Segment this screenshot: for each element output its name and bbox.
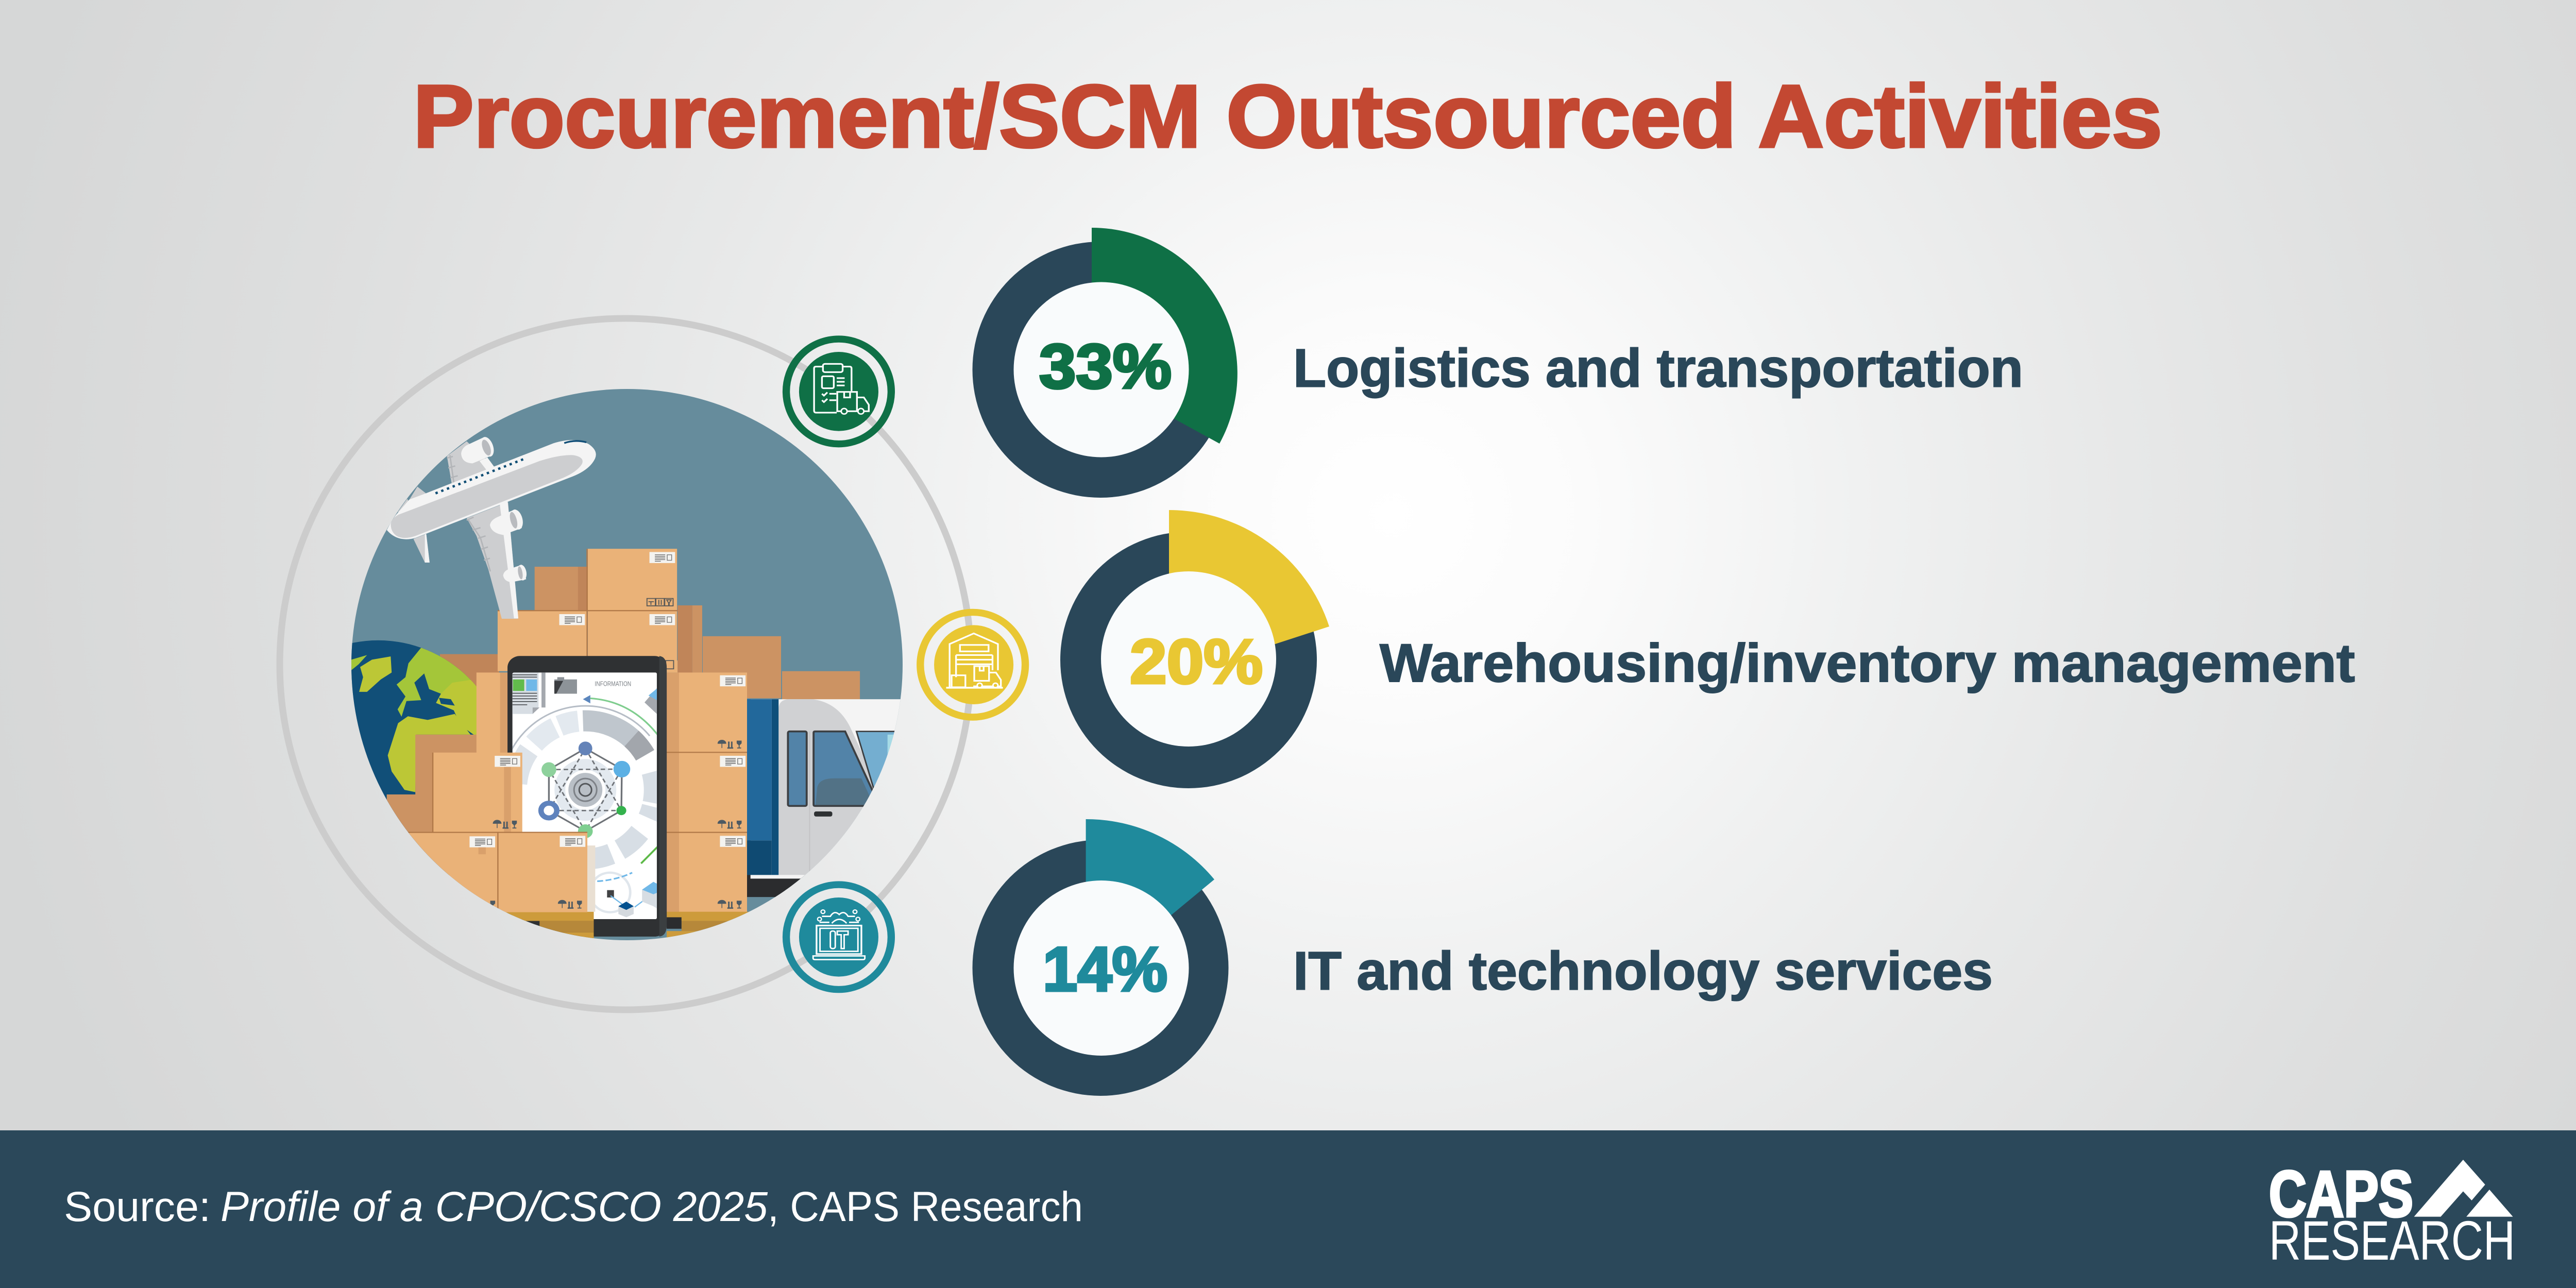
wedge: 20% bbox=[1169, 510, 1329, 679]
outer grey ring bbox=[280, 318, 971, 1010]
right pallet bbox=[667, 912, 765, 940]
screen: document bbox=[513, 672, 546, 714]
land: eurasia bbox=[397, 648, 477, 735]
donut: warehousing 20% bbox=[1060, 510, 1329, 788]
wedge: 14% bbox=[1086, 819, 1214, 986]
sky bbox=[350, 386, 907, 943]
left pallet bbox=[405, 912, 594, 942]
screen: cube diagram bbox=[589, 873, 658, 917]
illustration: logistics scene in circle bbox=[351, 389, 903, 940]
land: africa bbox=[388, 714, 470, 792]
footer bar bbox=[0, 1130, 2576, 1288]
label: warehousing: Warehousing/inventory management bbox=[1380, 633, 2355, 693]
donut: logistics 33% bbox=[973, 228, 1238, 498]
source note bbox=[64, 1183, 1083, 1230]
earth globe bbox=[351, 640, 477, 875]
value: 14%: 14% bbox=[1043, 934, 1167, 1004]
icon: logistics clipboard and truck bbox=[786, 339, 891, 444]
label: IT: IT and technology services bbox=[1293, 941, 1993, 1002]
screen: pie bbox=[645, 688, 657, 714]
donut: IT 14% bbox=[973, 819, 1228, 1096]
screen: information label: INFORMATION bbox=[595, 680, 631, 687]
front cardboard boxes bbox=[405, 753, 595, 912]
land: central asia bbox=[436, 680, 477, 735]
screen: radial ring bbox=[488, 692, 683, 887]
smartphone with network diagram bbox=[488, 656, 683, 937]
airplane bbox=[387, 435, 596, 619]
wedge: 33% bbox=[1092, 228, 1238, 444]
screen: folder bbox=[554, 677, 577, 693]
logo mountains bbox=[2414, 1160, 2513, 1217]
left and right cardboard boxes bbox=[387, 660, 748, 912]
source note: Profile of a CPO/CSCO 2025 bbox=[221, 1183, 768, 1230]
screen: arrow bbox=[583, 695, 590, 703]
truck bbox=[747, 699, 908, 897]
value: 20%: 20% bbox=[1130, 626, 1263, 697]
source note: , CAPS Research bbox=[768, 1183, 1083, 1230]
back cardboard boxes bbox=[440, 549, 860, 709]
logo: CAPS Research: RESEARCH bbox=[2269, 1209, 2515, 1272]
logo wordmark: CAPS bbox=[2269, 1158, 2413, 1230]
title: Procurement/SCM Outsourced Activities bbox=[413, 67, 2162, 166]
land: greenland bbox=[359, 656, 392, 692]
logo: CAPS Research bbox=[2269, 1158, 2515, 1272]
source note: Source: bbox=[64, 1183, 211, 1230]
value: 33%: 33% bbox=[1039, 331, 1172, 401]
icon: IT laptop bbox=[786, 885, 891, 990]
label: logistics: Logistics and transportation bbox=[1293, 338, 2023, 399]
icon: warehouse and forklift bbox=[920, 612, 1025, 717]
screen: hexagon network bbox=[541, 741, 630, 838]
